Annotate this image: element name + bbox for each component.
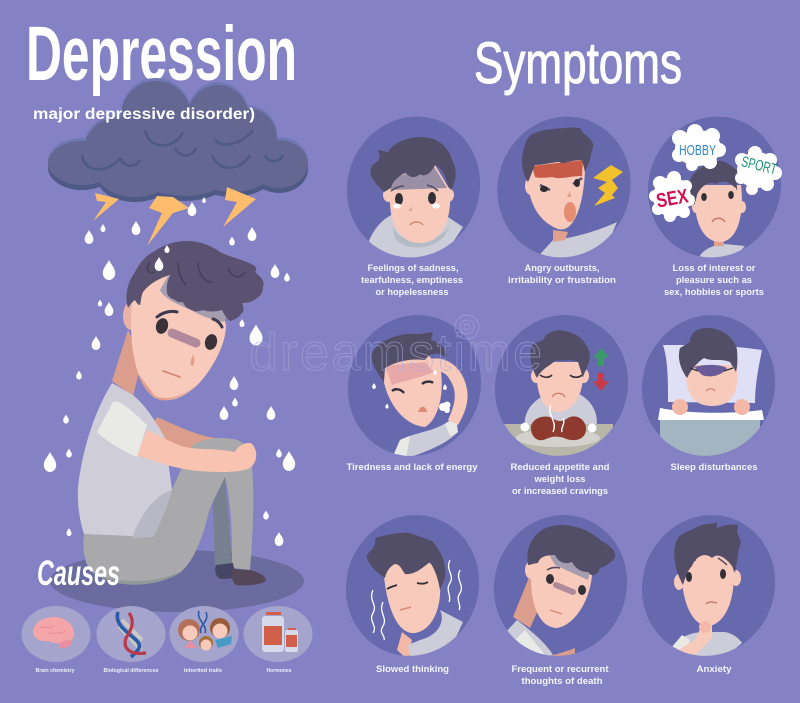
- panel: anxiety: [642, 515, 775, 674]
- ground shadow: [50, 550, 304, 612]
- eyes: [154, 317, 170, 335]
- panel: anger: [498, 116, 630, 285]
- caption: weight loss: [534, 474, 586, 485]
- hair: [126, 241, 264, 321]
- caption: Anxiety: [696, 664, 732, 675]
- forehead shadow: [160, 276, 228, 322]
- cause: hormones: [244, 606, 312, 674]
- panel: causes: [22, 606, 312, 674]
- caption: Reduced appetite and: [510, 462, 610, 473]
- caption: Slowed thinking: [376, 664, 449, 675]
- caption: [510, 462, 610, 497]
- cause: biological differences: [96, 606, 166, 674]
- storm cloud: [48, 78, 308, 202]
- illustration: dark thoughts face: [505, 525, 615, 662]
- caption: Loss of interest or: [672, 263, 756, 274]
- caption: Sleep disturbances: [670, 462, 758, 473]
- lightning bolts: [93, 187, 256, 246]
- cause: inherited traits: [170, 606, 238, 674]
- near shoe: [232, 569, 266, 585]
- caption: Feelings of sadness,: [368, 263, 458, 274]
- near arm: [137, 430, 256, 472]
- panel: sleep: [642, 315, 775, 472]
- caption: sex, hobbies or sports: [664, 287, 764, 298]
- panel: tiredness: [346, 315, 481, 472]
- caption: pleasure such as: [676, 275, 752, 286]
- illustration: sleeping face: [658, 328, 764, 462]
- caption: Angry outbursts,: [524, 263, 600, 274]
- caption: Tiredness and lack of energy: [346, 462, 478, 473]
- raindrops: [44, 197, 295, 546]
- illustration: crying face: [362, 137, 463, 262]
- caption: [361, 263, 463, 298]
- title: Depression: Depression: [26, 11, 297, 97]
- caption: [508, 263, 616, 286]
- cause: biological differences: Biological differences: [104, 668, 158, 674]
- near shin: [225, 467, 253, 570]
- heading: Causes: Causes: [37, 554, 120, 593]
- bubble: sport: [735, 146, 782, 195]
- main character: sad man sitting: [78, 241, 266, 585]
- trousers: [83, 438, 252, 583]
- illustration: loss of interest face: [689, 161, 746, 262]
- brows: [157, 311, 222, 327]
- head: [131, 270, 226, 400]
- illustration: angry face: [522, 128, 623, 262]
- caption: [664, 263, 764, 298]
- neck: [112, 330, 142, 396]
- bubble: hobby: [672, 124, 726, 171]
- panel: appetite: [495, 315, 628, 496]
- t-shirt: [78, 383, 172, 538]
- bubble: hobby: HOBBY: [679, 142, 716, 159]
- watermark: dreamstime: [249, 324, 542, 382]
- panel: sadness: [347, 116, 480, 297]
- bubble: sex: [649, 171, 695, 222]
- caption: Frequent or recurrent: [512, 664, 609, 675]
- title: Symptoms: Symptoms: [474, 31, 682, 96]
- far arm: [150, 417, 215, 452]
- caption: [512, 664, 609, 687]
- cause: brain chemistry: [22, 606, 90, 674]
- illustration: anxious face: [672, 522, 742, 660]
- bubble: sport: SPORT: [740, 153, 779, 178]
- bubble: sex: SEX: [655, 185, 691, 213]
- illustration: slowed thinking face: [367, 533, 463, 660]
- far shin: [213, 477, 232, 566]
- blush band: [172, 333, 196, 343]
- subtitle: major depressive disorder): [33, 106, 255, 123]
- caption: tearfulness, emptiness: [361, 275, 463, 286]
- caption: thoughts of death: [522, 676, 603, 687]
- panel: slowed thinking: [346, 515, 479, 674]
- sleeve: [97, 402, 147, 457]
- caption: or hopelessness: [376, 287, 448, 298]
- caption: irritability or frustration: [508, 275, 616, 286]
- ear: [123, 302, 139, 330]
- far shoe: [215, 563, 236, 579]
- caption: or increased cravings: [512, 486, 608, 497]
- illustration: appetite face: [498, 330, 613, 460]
- panel: thoughts of death: [494, 515, 627, 686]
- mouth: [163, 371, 180, 377]
- cause: hormones: Hormones: [266, 668, 292, 674]
- cause: brain chemistry: Brain chemistry: [36, 668, 75, 674]
- cause: inherited traits: Inherited traits: [184, 668, 222, 674]
- illustration: tired face: [372, 332, 468, 458]
- nose: [190, 355, 194, 366]
- panel: loss of interest: [648, 116, 782, 297]
